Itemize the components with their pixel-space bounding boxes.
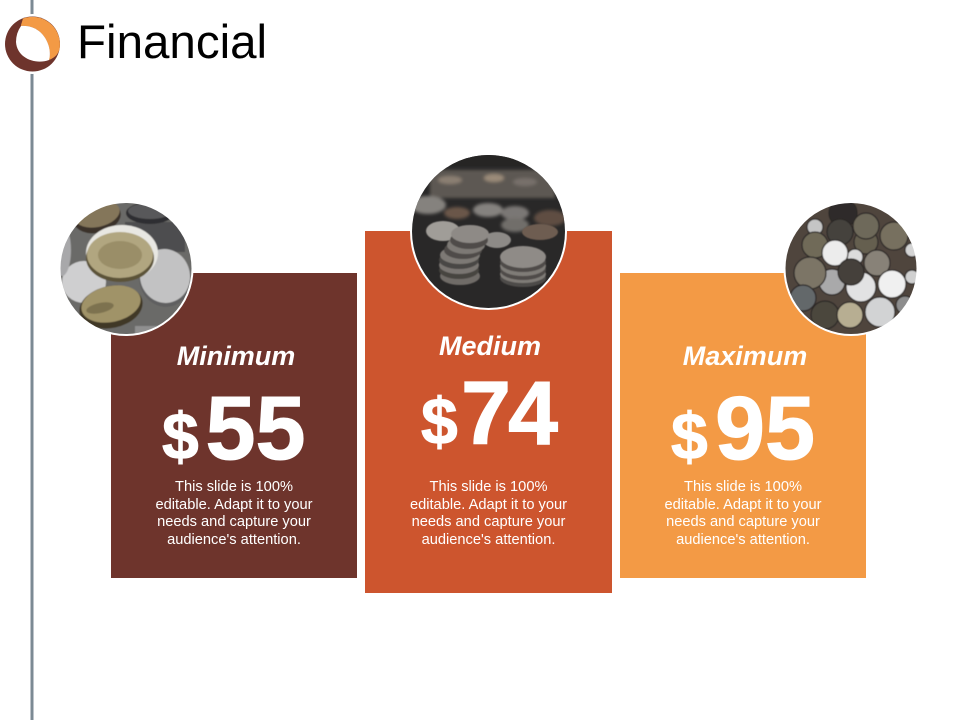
logo <box>2 14 62 74</box>
description: minimum: needs and capture your <box>157 514 311 530</box>
description: maximum: editable. Adapt it to your <box>664 497 822 513</box>
price: 95: 95 <box>715 379 815 479</box>
label: minimum: Minimum <box>177 341 295 371</box>
price: 74: 74 <box>461 364 558 464</box>
description: medium: editable. Adapt it to your <box>410 497 567 513</box>
panel: maximum <box>620 273 866 578</box>
photo: coin stacks <box>410 152 568 312</box>
photo: gold and silver coins <box>60 203 194 336</box>
description: maximum: audience's attention. <box>676 532 810 548</box>
vertical rule <box>30 0 34 720</box>
description: medium: This slide is 100% <box>430 479 548 495</box>
title: Financial <box>77 16 267 69</box>
price: 55: $ <box>162 399 199 473</box>
panel: medium <box>365 231 612 593</box>
description: maximum: needs and capture your <box>666 514 820 530</box>
label: medium: Medium <box>439 331 541 361</box>
description: medium: audience's attention. <box>422 532 555 548</box>
label: maximum: Maximum <box>683 341 807 371</box>
description: medium: needs and capture your <box>412 514 566 530</box>
description: minimum: This slide is 100% <box>175 479 293 495</box>
price: 95: $ <box>671 399 708 473</box>
price: 74: $ <box>421 384 458 458</box>
price: 55: 55 <box>206 379 306 479</box>
description: minimum: audience's attention. <box>167 532 301 548</box>
photo: mixed coins <box>783 199 919 338</box>
panel: minimum <box>111 273 357 578</box>
description: maximum: This slide is 100% <box>684 479 802 495</box>
description: minimum: editable. Adapt it to your <box>155 497 313 513</box>
